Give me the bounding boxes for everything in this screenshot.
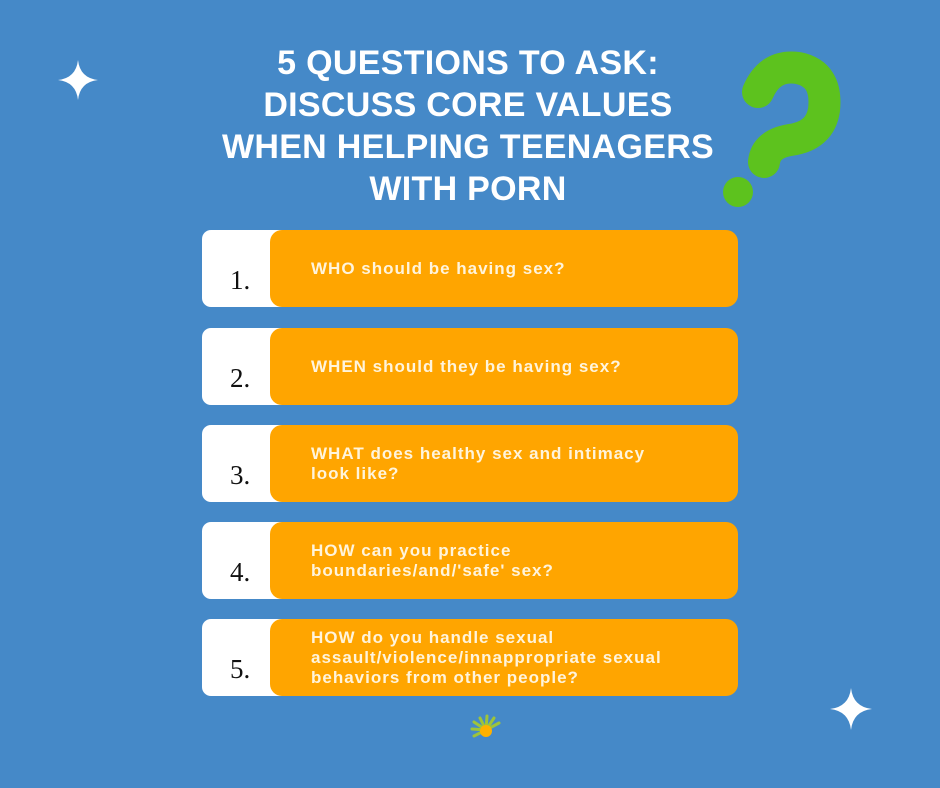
item 4: HOW can you practice	[311, 540, 511, 560]
item 3: look like?	[311, 464, 399, 482]
item 4: 4.	[230, 557, 250, 587]
item 1	[202, 230, 738, 307]
item 5: HOW do you handle sexual	[311, 628, 554, 646]
icon: sparkle right	[830, 688, 872, 730]
icon: green question mark	[723, 52, 840, 207]
item 5: assault/violence/innappropriate sexual	[311, 648, 662, 666]
title	[222, 44, 714, 208]
item 2	[202, 328, 738, 405]
item 4	[202, 522, 738, 599]
title: 5 QUESTIONS TO ASK:	[277, 44, 659, 82]
icon: sparkle left	[58, 60, 98, 100]
item 2: WHEN should they be having sex?	[311, 356, 622, 376]
icon: sun logo	[470, 714, 500, 738]
item 3: WHAT does healthy sex and intimacy	[311, 444, 645, 462]
item 2: 2.	[230, 363, 250, 393]
item 5: 5.	[230, 654, 250, 684]
title: WITH PORN	[369, 170, 567, 208]
title: WHEN HELPING TEENAGERS	[222, 128, 714, 166]
title: DISCUSS CORE VALUES	[263, 86, 673, 124]
item 3: 3.	[230, 460, 250, 490]
item 5: behaviors from other people?	[311, 668, 579, 686]
item 1: 1.	[230, 265, 250, 295]
item 4: boundaries/and/'safe' sex?	[311, 560, 554, 580]
item 1: WHO should be having sex?	[311, 258, 566, 278]
item 5	[202, 619, 738, 696]
item 3	[202, 425, 738, 502]
